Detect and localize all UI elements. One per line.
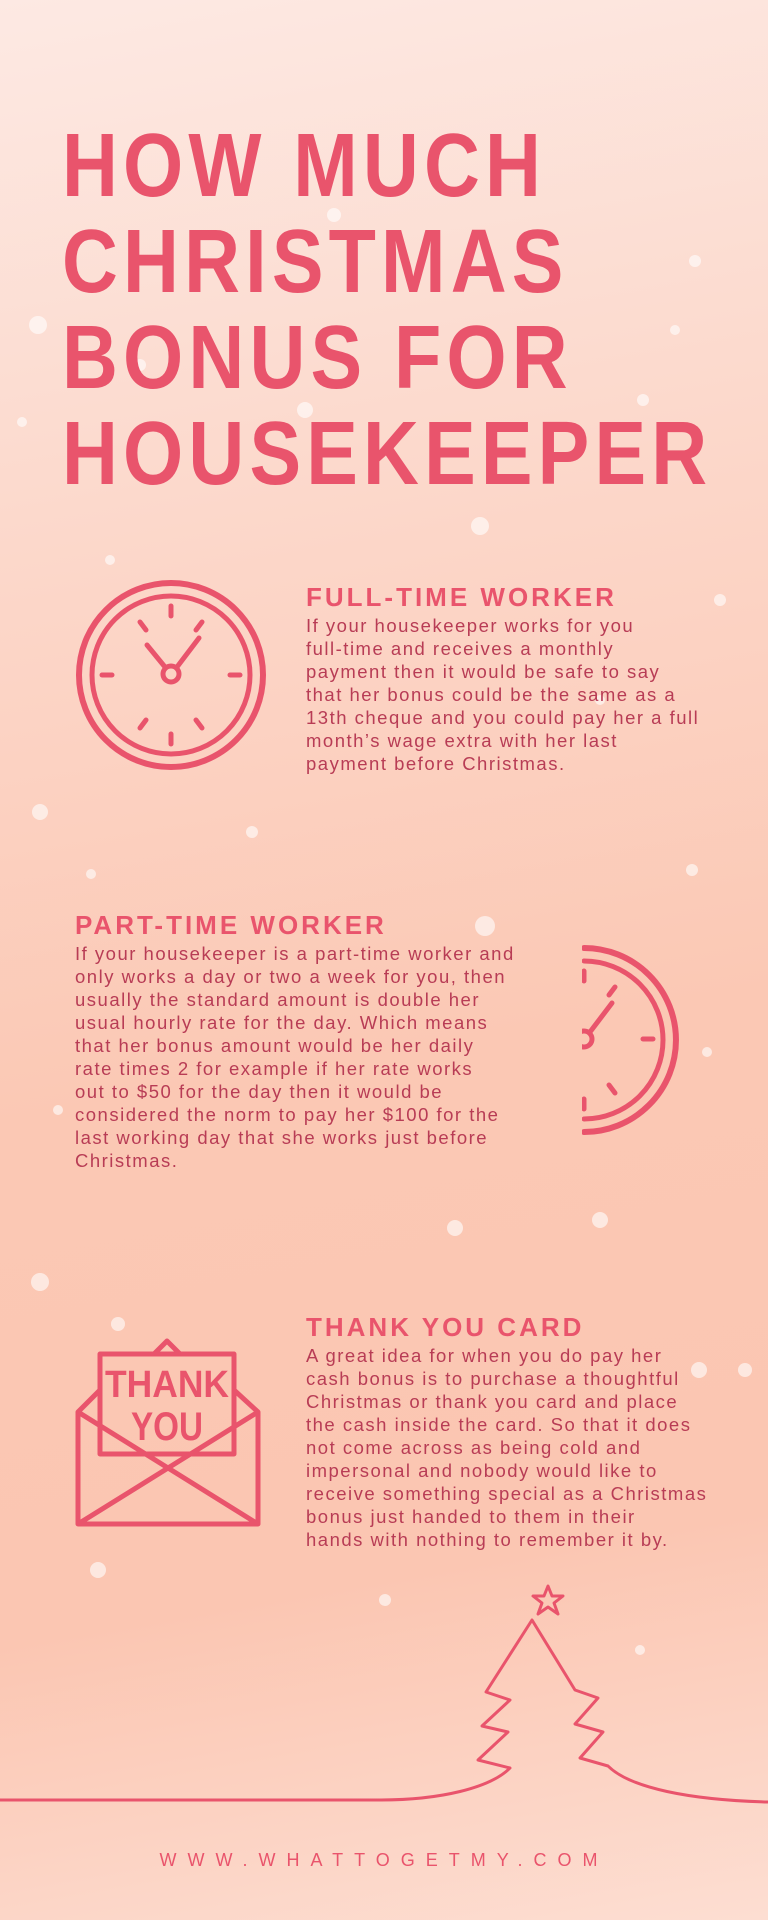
text: thank you card: impersonal and nobody would like to — [306, 1460, 658, 1481]
text: full-time — [306, 615, 699, 774]
text: full-time: payment before Christmas. — [306, 753, 566, 774]
text: full-time: month’s wage extra with her last — [306, 730, 618, 751]
icon: thank you envelope: YOU — [131, 1405, 203, 1449]
title: HOW MUCH — [62, 116, 546, 216]
text: thank you card — [306, 1345, 707, 1550]
text: full-time: full-time and receives a monthly — [306, 638, 614, 659]
text: thank you card: cash bonus is to purchase a thoughtful — [306, 1368, 680, 1389]
text: full-time: that her bonus could be the same as a — [306, 684, 676, 705]
title: BONUS FOR — [62, 308, 573, 408]
title: CHRISTMAS — [62, 212, 569, 312]
icon: thank you envelope: THANK — [105, 1364, 230, 1406]
heading: full-time: FULL-TIME WORKER — [306, 582, 617, 612]
title: HOUSEKEEPER — [62, 404, 712, 504]
text: part-time: If your housekeeper is a part-time worker and — [75, 943, 515, 964]
text: part-time: only works a day or two a week for you, then — [75, 966, 506, 987]
text: thank you card: not come across as being cold and — [306, 1437, 641, 1458]
icon: christmas tree line — [0, 1584, 768, 1804]
text: thank you card: bonus just handed to them in their — [306, 1506, 636, 1527]
text: part-time: usual hourly rate for the day. Which means — [75, 1012, 488, 1033]
text: part-time: usually the standard amount is double her — [75, 989, 480, 1010]
text: thank you card: hands with nothing to remember it by. — [306, 1529, 669, 1550]
heading: thank you card: THANK YOU CARD — [306, 1312, 584, 1342]
text: thank you card: Christmas or thank you card and place — [306, 1391, 678, 1412]
icon: half clock — [582, 945, 679, 1135]
text: full-time: If your housekeeper works for you — [306, 615, 634, 636]
title — [62, 116, 712, 504]
text: full-time: payment then it would be safe to say — [306, 661, 660, 682]
text: part-time — [75, 943, 515, 1171]
text: part-time: last working day that she works just before — [75, 1127, 488, 1148]
text: part-time: Christmas. — [75, 1150, 178, 1171]
heading: part-time: PART-TIME WORKER — [75, 910, 387, 940]
text: thank you card: the cash inside the card. So that it does — [306, 1414, 691, 1435]
text: part-time: considered the norm to pay her $100 for the — [75, 1104, 499, 1125]
text: part-time: out to $50 for the day then it would be — [75, 1081, 443, 1102]
text: thank you card: receive something special as a Christmas — [306, 1483, 707, 1504]
text: thank you card: A great idea for when you do pay her — [306, 1345, 662, 1366]
text: part-time: rate times 2 for example if her rate works — [75, 1058, 473, 1079]
footer url: WWW.WHATTOGETMY.COM — [160, 1850, 608, 1870]
text: part-time: that her bonus amount would be her daily — [75, 1035, 474, 1056]
icon: thank you envelope — [76, 1338, 260, 1526]
text: full-time: 13th cheque and you could pay her a full — [306, 707, 699, 728]
icon: clock full-time — [76, 580, 266, 770]
